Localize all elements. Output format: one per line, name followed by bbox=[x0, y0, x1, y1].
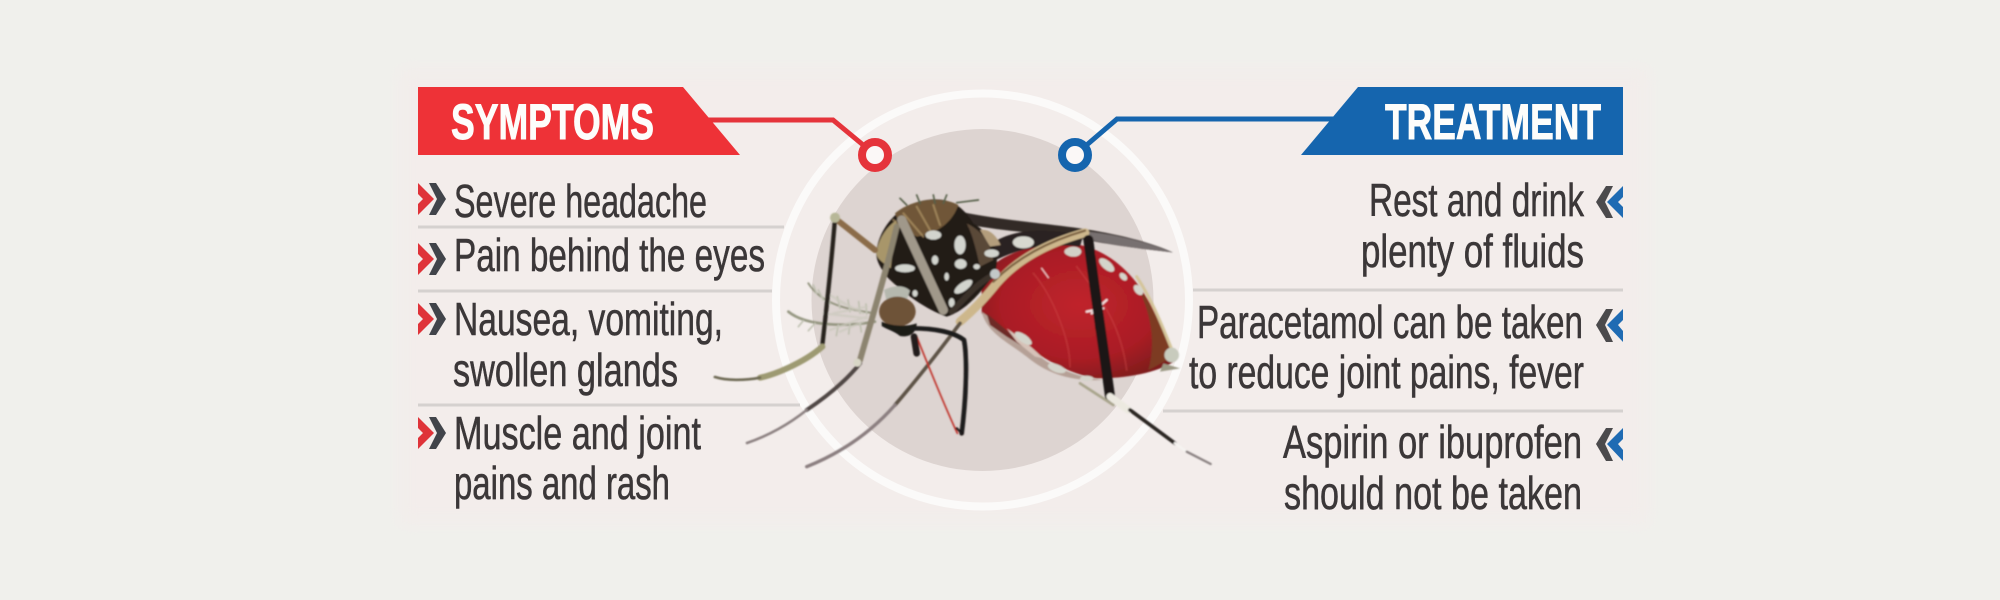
proboscis and black leg bbox=[912, 328, 966, 433]
symptom: pain behind the eyes bbox=[418, 229, 765, 281]
treatment banner: TREATMENT bbox=[1385, 94, 1601, 150]
abdomen bbox=[982, 230, 1180, 381]
thorax bbox=[876, 195, 1001, 317]
symptom: nausea, vomiting, swollen glands bbox=[418, 293, 723, 396]
wing bbox=[960, 212, 1173, 252]
white ring bbox=[776, 94, 1189, 506]
background panel bbox=[398, 68, 1650, 525]
treatment: aspirin warning bbox=[1283, 416, 1623, 519]
hind leg bbox=[807, 231, 1085, 467]
symptom: severe headache bbox=[418, 175, 707, 227]
connector line: symptoms bbox=[705, 120, 888, 168]
abdomen edge spots bbox=[1012, 236, 1145, 381]
panel: symptoms bbox=[418, 87, 888, 509]
symptom: pain behind the eyes: Pain behind the eyes bbox=[454, 229, 765, 281]
treatment banner bbox=[1301, 87, 1623, 155]
treatment: paracetamol: to reduce joint pains, fever bbox=[1189, 346, 1584, 398]
treatment: paracetamol: Paracetamol can be taken bbox=[1197, 296, 1583, 348]
connector line: treatment bbox=[1062, 119, 1335, 168]
head bbox=[879, 286, 917, 336]
panel: treatment bbox=[1062, 87, 1623, 519]
central circle with mosquito bbox=[715, 94, 1211, 506]
symptom: severe headache: Severe headache bbox=[454, 175, 707, 227]
symptoms banner: SYMPTOMS bbox=[451, 94, 654, 150]
icon: mosquito bbox=[715, 195, 1211, 467]
symptom: nausea, vomiting, swollen glands: swollen glands bbox=[453, 344, 678, 396]
treatment: rest and fluids: plenty of fluids bbox=[1361, 225, 1584, 277]
treatment: paracetamol bbox=[1189, 296, 1623, 398]
symptom: muscle and joint pains and rash: pains and rash bbox=[454, 457, 670, 509]
symptom: muscle and joint pains and rash bbox=[418, 407, 701, 509]
treatment: rest and fluids: Rest and drink bbox=[1369, 174, 1585, 226]
treatment: rest and fluids bbox=[1361, 174, 1623, 277]
treatment: aspirin warning: Aspirin or ibuprofen bbox=[1283, 416, 1582, 468]
black hind leg bbox=[1080, 240, 1211, 464]
antennae bbox=[788, 283, 875, 336]
shaded disc bbox=[812, 129, 1154, 471]
symptom: nausea, vomiting, swollen glands: Nausea, vomiting, bbox=[454, 293, 723, 345]
symptom: muscle and joint pains and rash: Muscle and joint bbox=[454, 407, 701, 459]
middle leg bbox=[747, 227, 897, 443]
silver leg segment bbox=[902, 220, 943, 310]
front leg bbox=[715, 213, 875, 380]
treatment: aspirin warning: should not be taken bbox=[1284, 467, 1582, 519]
